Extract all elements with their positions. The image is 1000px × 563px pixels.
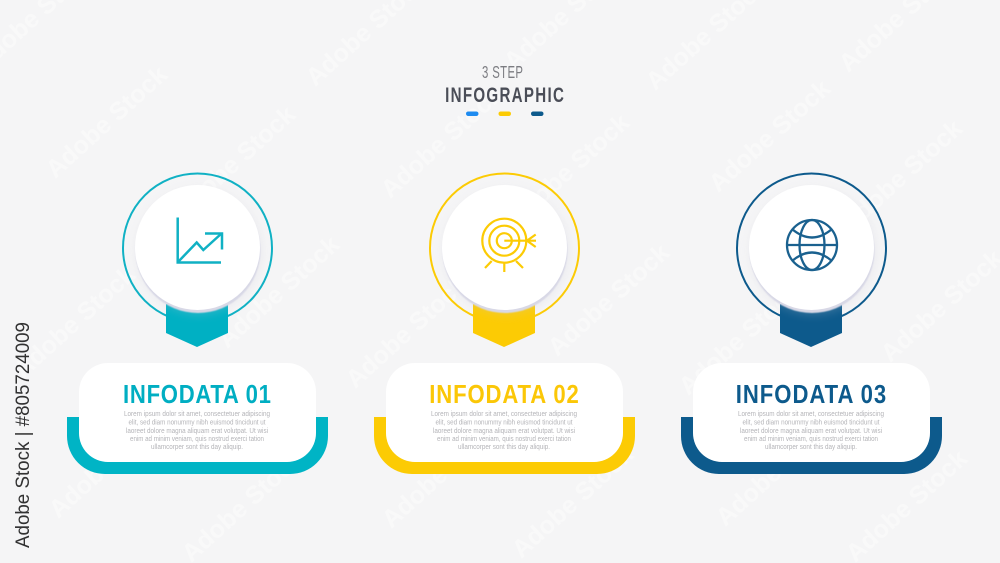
body text: ullamcorper sont this day aliquip. — [458, 444, 550, 451]
stock watermark pattern: Adobe Stock — [674, 277, 806, 401]
body text: laoreet dolore magna aliquam erat volutpat. Ut wisi — [433, 428, 575, 435]
heading: INFODATA 01 — [123, 380, 271, 409]
body text: enim ad minim veniam, quis nostrud exerci tation — [437, 436, 571, 443]
panel: step 03 — [681, 174, 942, 474]
body text: elit, sed diam nonummy nibh euismod tincidunt ut — [128, 420, 266, 426]
body text: laoreet dolore magna aliquam erat volutpat. Ut wisi — [126, 428, 268, 435]
icon: growth chart — [178, 218, 222, 262]
white card — [79, 363, 316, 462]
heading: INFODATA 03 — [736, 380, 886, 409]
subtitle: 3 STEP — [482, 64, 523, 83]
body text: Lorem ipsum dolor sit amet, consectetuer adipiscing — [738, 411, 884, 418]
body text: enim ad minim veniam, quis nostrud exerci tation — [130, 436, 264, 443]
body text: elit, sed diam nonummy nibh euismod tincidunt ut — [436, 420, 573, 426]
body text — [431, 411, 577, 451]
body text: ullamcorper sont this day aliquip. — [765, 444, 857, 451]
heading: INFODATA 02 — [429, 380, 579, 409]
white card — [386, 363, 623, 462]
circle badge — [442, 185, 569, 314]
stock watermark pattern: Adobe Stock — [341, 270, 473, 394]
body text: elit, sed diam nonummy nibh euismod tincidunt ut — [742, 420, 880, 426]
body text — [738, 411, 884, 451]
icon: target — [482, 219, 536, 272]
circle badge — [749, 185, 876, 314]
panel: step 02 — [374, 174, 635, 474]
bottom bracket — [374, 417, 635, 474]
pennant — [473, 304, 535, 347]
stock watermark pattern: Adobe Stock — [543, 238, 675, 362]
circle badge — [135, 185, 262, 314]
outline ring — [737, 174, 886, 322]
pennant — [780, 304, 842, 347]
stock watermark pattern: Adobe Stock — [711, 408, 843, 532]
stock watermark pattern: Adobe Stock — [836, 114, 968, 238]
title block — [445, 64, 564, 116]
main heading: INFOGRAPHIC — [445, 82, 564, 107]
stock watermark pattern: Adobe Stock — [44, 400, 176, 524]
icon: globe — [787, 220, 837, 270]
stock watermark pattern: Adobe Stock — [377, 410, 509, 534]
stock watermark pattern: Adobe Stock — [169, 100, 301, 224]
bottom bracket — [67, 417, 328, 474]
body text — [124, 411, 270, 451]
bottom bracket — [681, 417, 942, 474]
stock watermark pattern: Adobe Stock — [704, 74, 836, 198]
white card — [693, 363, 930, 462]
body text: enim ad minim veniam, quis nostrud exerci tation — [744, 436, 878, 443]
stock watermark pattern: Adobe Stock — [41, 60, 173, 184]
body text: laoreet dolore magna aliquam erat volutpat. Ut wisi — [740, 428, 882, 435]
pennant — [166, 304, 228, 347]
body text: Lorem ipsum dolor sit amet, consectetuer adipiscing — [124, 411, 270, 418]
stock watermark pattern: Adobe Stock — [376, 80, 508, 204]
panel: step 01 — [67, 174, 328, 474]
stock watermark pattern: Adobe Stock — [507, 440, 639, 563]
stock watermark pattern: Adobe Stock — [213, 230, 345, 354]
body text: ullamcorper sont this day aliquip. — [151, 444, 243, 451]
body text: Lorem ipsum dolor sit amet, consectetuer adipiscing — [431, 411, 577, 418]
stock watermark pattern: Adobe Stock — [9, 260, 141, 384]
outline ring — [430, 174, 579, 322]
colour markers — [466, 112, 544, 116]
outline ring — [123, 174, 272, 322]
stock watermark pattern: Adobe Stock — [503, 108, 635, 232]
side stock credit: Adobe Stock | #805724009 — [13, 322, 34, 548]
